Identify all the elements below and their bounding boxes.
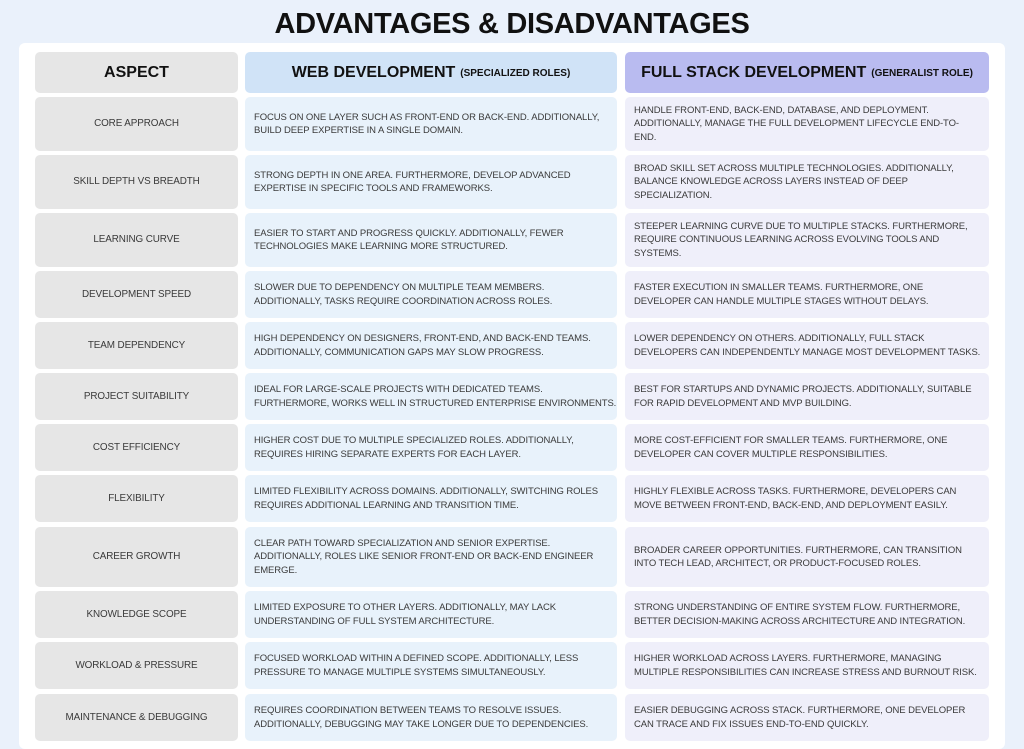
cell: web skill — [245, 155, 617, 209]
row: career growth: CAREER GROWTH — [93, 551, 180, 562]
cell: full knowledge: BETTER DECISION-MAKING ACROSS ARCHITECTURE AND INTEGRATION. — [634, 616, 965, 626]
header: aspect — [35, 52, 238, 93]
cell: web speed: SLOWER DUE TO DEPENDENCY ON MULTIPLE TEAM MEMBERS. — [254, 282, 544, 293]
cell: full knowledge: STRONG UNDERSTANDING OF ENTIRE SYSTEM FLOW. FURTHERMORE, — [634, 602, 960, 613]
cell: web workload: PRESSURE TO MANAGE MULTIPLE SYSTEMS SIMULTANEOUSLY. — [254, 666, 545, 678]
header: full stack development: FULL STACK DEVELOPMENT — [641, 64, 866, 81]
cell: full flexibility — [625, 475, 989, 522]
cell: web learning — [245, 213, 617, 267]
cell: web speed: ADDITIONALLY, TASKS REQUIRE COORDINATION ACROSS ROLES. — [254, 296, 552, 306]
cell: web team: ADDITIONALLY, COMMUNICATION GAPS MAY SLOW PROGRESS. — [254, 346, 544, 358]
cell: full team — [625, 322, 989, 369]
cell: full project: BEST FOR STARTUPS AND DYNAMIC PROJECTS. ADDITIONALLY, SUITABLE — [634, 384, 971, 395]
row: project suitability — [35, 373, 238, 420]
cell: web maintenance: REQUIRES COORDINATION BETWEEN TEAMS TO RESOLVE ISSUES. — [254, 705, 561, 716]
cell: full core approach: END. — [634, 132, 656, 143]
row: workload — [35, 642, 238, 689]
header: web development: (SPECIALIZED ROLES) — [460, 68, 570, 79]
row: team dependency: TEAM DEPENDENCY — [88, 340, 185, 351]
cell: full knowledge — [625, 591, 989, 638]
cell: full flexibility: HIGHLY FLEXIBLE ACROSS TASKS. FURTHERMORE, DEVELOPERS CAN — [634, 486, 956, 497]
cell: web core approach: BUILD DEEP EXPERTISE IN A SINGLE DOMAIN. — [254, 125, 463, 136]
cell: full maintenance — [625, 694, 989, 741]
row: skill depth — [35, 155, 238, 209]
cell: full skill — [625, 155, 989, 209]
cell: full cost: MORE COST-EFFICIENT FOR SMALLER TEAMS. FURTHERMORE, ONE — [634, 435, 947, 446]
row: development speed — [35, 271, 238, 318]
cell: web skill: EXPERTISE IN SPECIFIC TOOLS AND FRAMEWORKS. — [254, 183, 493, 194]
cell: full learning: REQUIRE CONTINUOUS LEARNING ACROSS EVOLVING TOOLS AND — [634, 234, 939, 245]
title: ADVANTAGES & DISADVANTAGES — [274, 8, 750, 40]
row: flexibility: FLEXIBILITY — [108, 493, 165, 504]
cell: full skill: BROAD SKILL SET ACROSS MULTIPLE TECHNOLOGIES. ADDITIONALLY, — [634, 163, 954, 174]
cell: web knowledge — [245, 591, 617, 638]
row: core approach: CORE APPROACH — [94, 118, 179, 129]
cell: web team — [245, 322, 617, 369]
cell: full speed: DEVELOPER CAN HANDLE MULTIPLE STAGES WITHOUT DELAYS. — [634, 296, 928, 306]
cell: full skill: SPECIALIZATION. — [634, 190, 712, 201]
cell: full career: BROADER CAREER OPPORTUNITIES. FURTHERMORE, CAN TRANSITION — [634, 544, 962, 556]
row: workload: WORKLOAD & PRESSURE — [75, 660, 198, 671]
header: aspect: ASPECT — [104, 64, 169, 81]
header: full stack development: (GENERALIST ROLE) — [871, 68, 973, 79]
cell: full workload: MULTIPLE RESPONSIBILITIES CAN INCREASE STRESS AND BURNOUT RISK. — [634, 666, 977, 678]
header: web development: WEB DEVELOPMENT — [292, 64, 455, 81]
cell: full career: INTO TECH LEAD, ARCHITECT, OR PRODUCT-FOCUSED ROLES. — [634, 558, 921, 569]
cell: web learning: EASIER TO START AND PROGRESS QUICKLY. ADDITIONALLY, FEWER — [254, 228, 563, 238]
cell: web flexibility: REQUIRES ADDITIONAL LEARNING AND TRANSITION TIME. — [254, 500, 519, 510]
cell: full speed: FASTER EXECUTION IN SMALLER TEAMS. FURTHERMORE, ONE — [634, 282, 923, 293]
cell: web workload — [245, 642, 617, 689]
cell: web knowledge: LIMITED EXPOSURE TO OTHER LAYERS. ADDITIONALLY, MAY LACK — [254, 602, 556, 613]
row: team dependency — [35, 322, 238, 369]
cell: web team: HIGH DEPENDENCY ON DESIGNERS, FRONT-END, AND BACK-END TEAMS. — [254, 333, 591, 344]
cell: web learning: TECHNOLOGIES MAKE LEARNING MORE STRUCTURED. — [254, 241, 508, 252]
row: project suitability: PROJECT SUITABILITY — [84, 391, 189, 402]
cell: full core approach: HANDLE FRONT-END, BACK-END, DATABASE, AND DEPLOYMENT. — [634, 105, 929, 116]
cell: web project — [245, 373, 617, 420]
cell: full core approach: ADDITIONALLY, MANAGE THE FULL DEVELOPMENT LIFECYCLE END-TO- — [634, 118, 959, 129]
row: flexibility — [35, 475, 238, 522]
cell: web career — [245, 527, 617, 587]
cell: web maintenance: ADDITIONALLY, DEBUGGING MAY TAKE LONGER DUE TO DEPENDENCIES. — [254, 718, 588, 730]
cell: full flexibility: MOVE BETWEEN FRONT-END, BACK-END, AND DEPLOYMENT EASILY. — [634, 500, 948, 510]
cell: web core approach: FOCUS ON ONE LAYER SUCH AS FRONT-END OR BACK-END. ADDITIONALLY, — [254, 112, 599, 122]
cell: full career — [625, 527, 989, 587]
cell: web knowledge: UNDERSTANDING OF FULL SYSTEM ARCHITECTURE. — [254, 616, 494, 626]
cell: full learning: STEEPER LEARNING CURVE DUE TO MULTIPLE STACKS. FURTHERMORE, — [634, 221, 968, 232]
cell: full cost: DEVELOPER CAN COVER MULTIPLE RESPONSIBILITIES. — [634, 448, 887, 460]
row: knowledge scope — [35, 591, 238, 638]
cell: full maintenance: EASIER DEBUGGING ACROSS STACK. FURTHERMORE, ONE DEVELOPER — [634, 705, 965, 716]
row: maintenance — [35, 694, 238, 741]
cell: web project: FURTHERMORE, WORKS WELL IN STRUCTURED ENTERPRISE ENVIRONMENTS. — [254, 398, 616, 408]
row: knowledge scope: KNOWLEDGE SCOPE — [86, 609, 186, 620]
cell: full workload — [625, 642, 989, 689]
cell: web maintenance — [245, 694, 617, 741]
row: learning curve: LEARNING CURVE — [93, 234, 180, 245]
cell: web core approach — [245, 97, 617, 151]
row: core approach — [35, 97, 238, 151]
cell: full learning — [625, 213, 989, 267]
row: cost efficiency — [35, 424, 238, 471]
header: full stack development — [625, 52, 989, 93]
cell: full team: LOWER DEPENDENCY ON OTHERS. ADDITIONALLY, FULL STACK — [634, 333, 924, 344]
cell: web project: IDEAL FOR LARGE-SCALE PROJECTS WITH DEDICATED TEAMS. — [254, 384, 543, 395]
cell: full speed — [625, 271, 989, 318]
cell: full core approach — [625, 97, 989, 151]
cell: full project — [625, 373, 989, 420]
cell: web cost: HIGHER COST DUE TO MULTIPLE SPECIALIZED ROLES. ADDITIONALLY, — [254, 435, 574, 446]
row: career growth — [35, 527, 238, 587]
cell: web career: EMERGE. — [254, 565, 297, 576]
row: learning curve — [35, 213, 238, 267]
cell: full project: FOR RAPID DEVELOPMENT AND MVP BUILDING. — [634, 398, 851, 408]
cell: web flexibility — [245, 475, 617, 522]
cell: web cost: REQUIRES HIRING SEPARATE EXPERTS FOR EACH LAYER. — [254, 448, 521, 460]
row: skill depth: SKILL DEPTH VS BREADTH — [73, 176, 200, 187]
cell: full cost — [625, 424, 989, 471]
cell: full learning: SYSTEMS. — [634, 248, 681, 259]
cell: full workload: HIGHER WORKLOAD ACROSS LAYERS. FURTHERMORE, MANAGING — [634, 653, 941, 664]
cell: full skill: BALANCE KNOWLEDGE ACROSS LAYERS INSTEAD OF DEEP — [634, 176, 908, 187]
cell: web flexibility: LIMITED FLEXIBILITY ACROSS DOMAINS. ADDITIONALLY, SWITCHING ROLES — [254, 486, 598, 497]
cell: full team: DEVELOPERS CAN INDEPENDENTLY MANAGE MOST DEVELOPMENT TASKS. — [634, 346, 980, 358]
cell: web career: ADDITIONALLY, ROLES LIKE SENIOR FRONT-END OR BACK-END ENGINEER — [254, 551, 593, 562]
cell: full maintenance: CAN TRACE AND FIX ISSUES END-TO-END QUICKLY. — [634, 718, 869, 730]
row: cost efficiency: COST EFFICIENCY — [93, 442, 180, 453]
row: maintenance: MAINTENANCE & DEBUGGING — [65, 712, 208, 723]
cell: web career: CLEAR PATH TOWARD SPECIALIZATION AND SENIOR EXPERTISE. — [254, 538, 550, 549]
cell: web workload: FOCUSED WORKLOAD WITHIN A DEFINED SCOPE. ADDITIONALLY, LESS — [254, 653, 578, 664]
cell: web cost — [245, 424, 617, 471]
row: development speed: DEVELOPMENT SPEED — [82, 289, 191, 300]
cell: web speed — [245, 271, 617, 318]
cell: web skill: STRONG DEPTH IN ONE AREA. FURTHERMORE, DEVELOP ADVANCED — [254, 170, 571, 180]
header: web development — [245, 52, 617, 93]
